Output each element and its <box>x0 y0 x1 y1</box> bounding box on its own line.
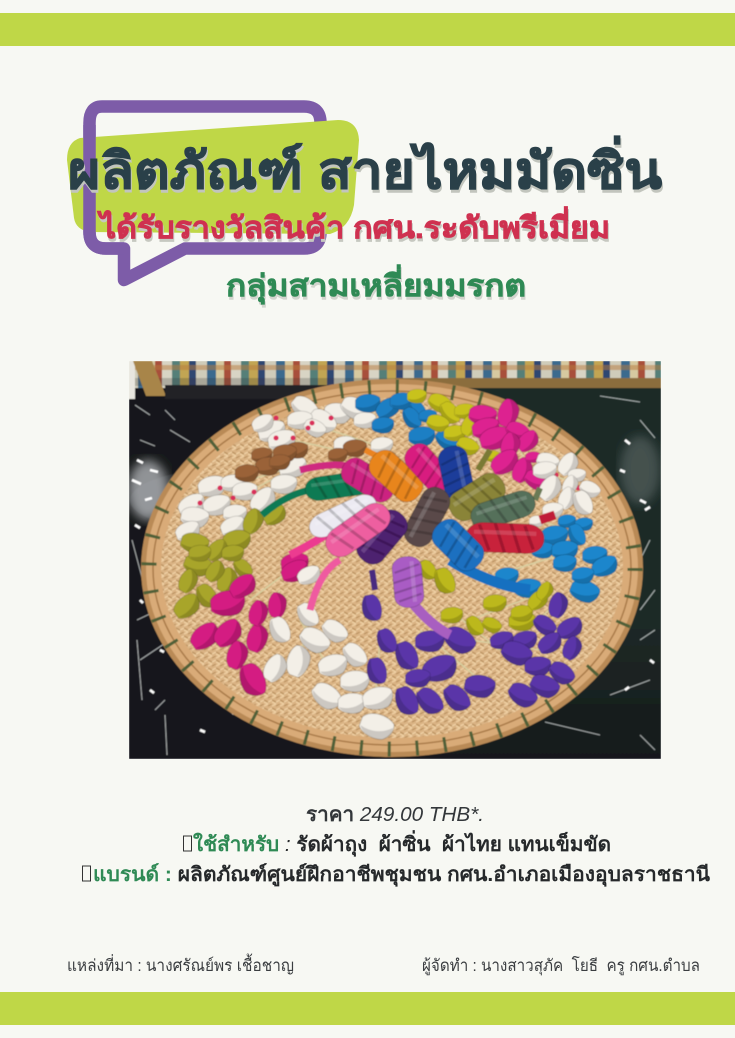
white bags right <box>529 450 603 527</box>
subtitle: producer group <box>226 264 527 308</box>
top green band <box>0 13 735 46</box>
price: ราคา 249.00 THB*. <box>306 804 484 826</box>
title: product name: ผลิตภัณฑ์ สายไหมมัดซิ่น <box>69 139 663 202</box>
photo background: black table <box>128 361 661 759</box>
thread stems <box>230 430 566 687</box>
tied silk coils in the centre <box>262 439 555 635</box>
blue bags right <box>495 515 621 606</box>
subtitle: award: ได้รับรางวัลสินค้า กศน.ระดับพรีเมี่ยม <box>97 206 610 245</box>
usage line: ใช้สำหรับ : รัดผ้าถุง ผ้าซิ่น ผ้าไทย แทนเข็มขัด <box>193 829 611 857</box>
subtitle: producer group: กลุ่มสามเหลี่ยมมรกต <box>226 264 526 305</box>
purple bags <box>360 590 586 719</box>
author credit: ผู้จัดทำ : นางสาวสุภัค โยธี ครู กศน.ตำบล <box>422 956 700 976</box>
brand line: แบรนด์ : ผลิตภัณฑ์ศูนย์ฝึกอาชีพชุมชน กศน.อำเภอเมืองอุบลราชธานี <box>93 863 710 888</box>
title speech bubble decoration <box>67 106 359 280</box>
subtitle: producer group: กลุ่มสามเหลี่ยมมรกต <box>227 267 527 308</box>
magenta bags top-right <box>468 398 546 490</box>
magenta bags left <box>186 552 311 700</box>
photo background: bookshelf <box>129 361 661 399</box>
title: product name: ผลิตภัณฑ์ สายไหมมัดซิ่น <box>68 136 662 199</box>
photo: silk bags on woven tray <box>128 361 661 759</box>
white bags bottom <box>259 563 397 743</box>
photo background: table scratches <box>132 396 655 755</box>
blue bags top <box>355 393 461 454</box>
olive yellow bags left <box>170 502 290 623</box>
white bags top-left <box>173 391 393 544</box>
yellow bags top <box>407 389 500 462</box>
bottom green band <box>0 992 735 1025</box>
red tie dots on white bags <box>200 418 578 503</box>
source credit: แหล่งที่มา : นางศรัณย์พร เชื้อชาญ <box>67 953 294 975</box>
yellow bags lower right <box>416 557 557 639</box>
brown bags <box>235 440 367 482</box>
subtitle: award: ได้รับรางวัลสินค้า กศน.ระดับพรีเมี่ยม <box>98 209 611 248</box>
woven tray <box>141 379 643 757</box>
